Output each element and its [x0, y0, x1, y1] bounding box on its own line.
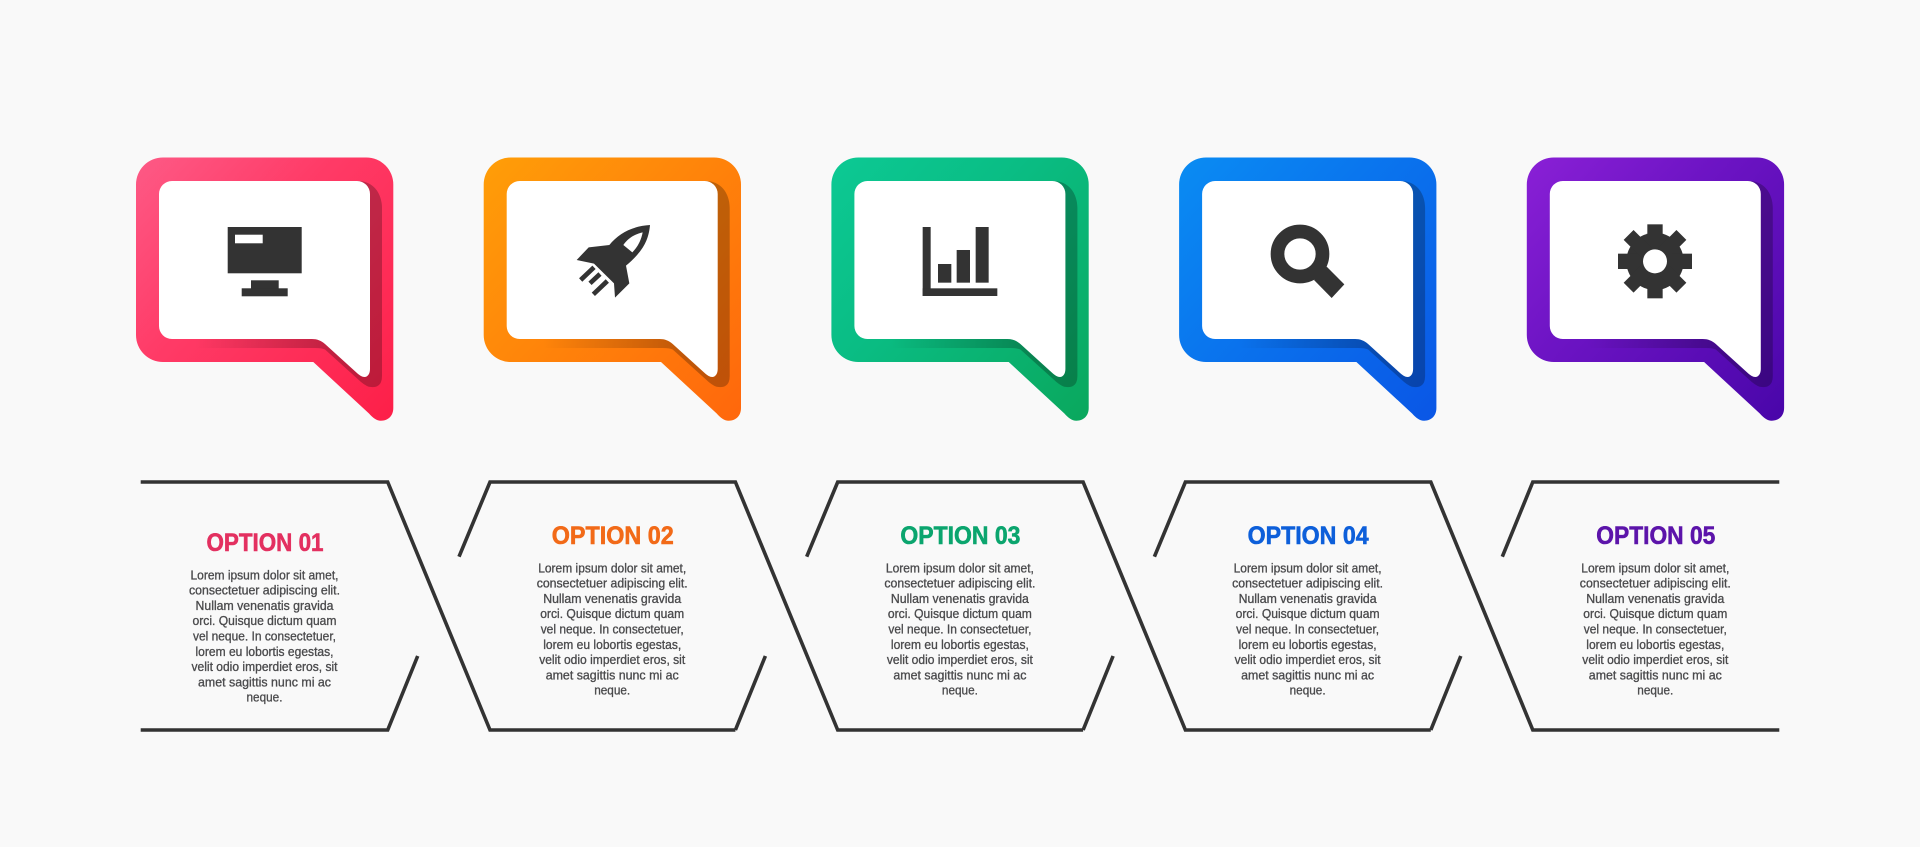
body text: option 3: consectetuer adipiscing elit. — [884, 577, 1035, 591]
bubble outline 1 — [136, 158, 393, 421]
heading: option 01: OPTION 01 — [206, 529, 324, 557]
body text: option 3: neque. — [942, 684, 978, 698]
icon: magnifier — [1277, 231, 1344, 298]
text block: option 2 — [537, 522, 688, 698]
body text: option 4: vel neque. In consectetuer, — [1236, 622, 1379, 636]
body text: option 1: amet sagittis nunc mi ac — [198, 675, 331, 689]
body text: option 3: amet sagittis nunc mi ac — [893, 668, 1026, 682]
body text: option 2 — [537, 561, 688, 698]
bubble interior 4 — [1202, 181, 1413, 377]
body text: option 5: Lorem ipsum dolor sit amet, — [1581, 561, 1729, 575]
body text: option 1: Nullam venenatis gravida — [196, 599, 334, 613]
body text: option 1: vel neque. In consectetuer, — [193, 630, 336, 644]
body text: option 1: orci. Quisque dictum quam — [192, 614, 336, 628]
body text: option 3: orci. Quisque dictum quam — [888, 607, 1032, 621]
bubble shadow 5 — [1561, 181, 1773, 387]
body text: option 4: orci. Quisque dictum quam — [1236, 607, 1380, 621]
body text: option 2: Lorem ipsum dolor sit amet, — [538, 561, 686, 575]
body text: option 4: velit odio imperdiet eros, sit — [1235, 653, 1381, 667]
panel: speech bubble 4 — [1179, 158, 1436, 421]
bubble shadow 2 — [518, 181, 730, 387]
bubble shadow 4 — [1213, 181, 1425, 387]
body text: option 4: lorem eu lobortis egestas, — [1239, 638, 1377, 652]
panel: speech bubble 5 — [1527, 158, 1784, 421]
body text: option 4: consectetuer adipiscing elit. — [1232, 577, 1383, 591]
body text: option 5: amet sagittis nunc mi ac — [1589, 668, 1722, 682]
text block: option 4 — [1232, 522, 1383, 698]
body text: option 5: orci. Quisque dictum quam — [1583, 607, 1727, 621]
body text: option 2: amet sagittis nunc mi ac — [546, 668, 679, 682]
body text: option 1: neque. — [246, 691, 282, 705]
connector lines: hexagon outlines — [141, 482, 1779, 730]
body text: option 4: Nullam venenatis gravida — [1239, 592, 1377, 606]
body text: option 3: Lorem ipsum dolor sit amet, — [886, 561, 1034, 575]
text block: option 1 — [189, 529, 340, 705]
icon: gear — [1618, 224, 1692, 298]
body text: option 1: velit odio imperdiet eros, sit — [192, 660, 338, 674]
body text: option 5: Nullam venenatis gravida — [1586, 592, 1724, 606]
body text: option 1: lorem eu lobortis egestas, — [196, 645, 334, 659]
bubble outline 3 — [831, 158, 1089, 421]
body text: option 4: amet sagittis nunc mi ac — [1241, 668, 1374, 682]
body text: option 3: vel neque. In consectetuer, — [888, 622, 1031, 636]
icon: monitor — [228, 227, 302, 296]
body text: option 5: consectetuer adipiscing elit. — [1580, 577, 1731, 591]
panel: speech bubble 1 — [136, 158, 393, 421]
body text: option 2: lorem eu lobortis egestas, — [543, 638, 681, 652]
text block: option 5 — [1580, 522, 1731, 698]
heading: option 05: OPTION 05 — [1596, 522, 1715, 550]
body text: option 3 — [884, 561, 1035, 698]
body text: option 4: Lorem ipsum dolor sit amet, — [1234, 561, 1382, 575]
body text: option 1: consectetuer adipiscing elit. — [189, 584, 340, 598]
bubble interior 5 — [1550, 181, 1761, 377]
body text: option 1 — [189, 568, 340, 705]
panel: speech bubble 3 — [831, 158, 1089, 421]
icon: bar chart — [923, 227, 997, 296]
body text: option 5: lorem eu lobortis egestas, — [1586, 638, 1724, 652]
bubble outline 5 — [1527, 158, 1784, 421]
bubble outline 4 — [1179, 158, 1436, 421]
body text: option 1: Lorem ipsum dolor sit amet, — [190, 568, 338, 582]
heading: option 02: OPTION 02 — [552, 522, 674, 550]
body text: option 3: Nullam venenatis gravida — [891, 592, 1029, 606]
body text: option 4: neque. — [1290, 684, 1326, 698]
body text: option 2: orci. Quisque dictum quam — [540, 607, 684, 621]
panel: speech bubble 2 — [484, 158, 741, 421]
text block: option 3 — [884, 522, 1035, 698]
bubble shadow 1 — [170, 181, 382, 387]
body text: option 5 — [1580, 561, 1731, 698]
heading: option 04: OPTION 04 — [1248, 522, 1369, 550]
body text: option 4 — [1232, 561, 1383, 698]
bubble outline 2 — [484, 158, 741, 421]
body text: option 2: velit odio imperdiet eros, sit — [539, 653, 686, 667]
bubble interior 1 — [159, 181, 370, 377]
icon: rocket — [577, 225, 650, 298]
body text: option 5: neque. — [1637, 684, 1673, 698]
body text: option 5: vel neque. In consectetuer, — [1584, 622, 1727, 636]
body text: option 2: neque. — [594, 684, 630, 698]
bubble shadow 3 — [865, 181, 1077, 387]
body text: option 3: lorem eu lobortis egestas, — [891, 638, 1029, 652]
body text: option 3: velit odio imperdiet eros, sit — [887, 653, 1033, 667]
bubble interior 3 — [854, 181, 1065, 377]
body text: option 2: Nullam venenatis gravida — [543, 592, 681, 606]
body text: option 2: vel neque. In consectetuer, — [541, 622, 684, 636]
body text: option 5: velit odio imperdiet eros, sit — [1582, 653, 1729, 667]
bubble interior 2 — [507, 181, 718, 377]
body text: option 2: consectetuer adipiscing elit. — [537, 577, 688, 591]
heading: option 03: OPTION 03 — [900, 522, 1020, 550]
